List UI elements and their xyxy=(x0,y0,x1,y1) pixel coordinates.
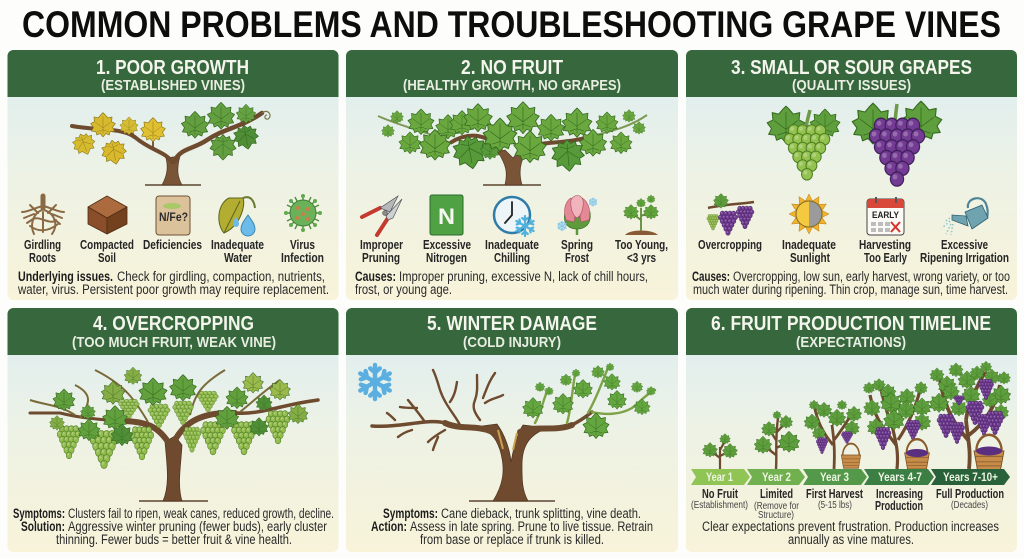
timeline labels: (5-15 lbs) xyxy=(818,500,852,511)
purple grape cluster xyxy=(852,101,942,186)
text block: causes: Causes: xyxy=(355,269,396,284)
icon labels: Inadequate xyxy=(211,238,264,252)
icon: young sprout xyxy=(623,195,659,235)
icon labels: Excessive xyxy=(423,238,471,252)
icon: pruners xyxy=(362,196,402,235)
icon labels xyxy=(360,238,668,265)
icon labels: Too Early xyxy=(864,251,907,265)
icon: nitrogen bag xyxy=(430,195,463,235)
icon: fertilizer bag xyxy=(156,196,190,235)
vine year 2 xyxy=(754,411,800,469)
vine illustration: too many clusters xyxy=(30,367,318,501)
icon: girdling roots xyxy=(22,196,64,234)
text block: causes: Causes: xyxy=(692,269,730,284)
timeline labels: Structure) xyxy=(758,510,794,521)
text block: causes: Improper pruning, excessive N, lack of chill hours, xyxy=(399,269,648,284)
icon: virus xyxy=(284,194,322,232)
icon: wilting leaf and water drop xyxy=(219,197,255,236)
panel 5: winter damage xyxy=(346,308,678,552)
green grape cluster xyxy=(767,106,840,180)
text block: causes xyxy=(692,269,1010,297)
icon: snowflake xyxy=(358,365,392,399)
text block: symptoms and solution: Clusters fail to ripen, weak canes, reduced growth, decline. xyxy=(68,506,334,521)
panel 4: overcropping xyxy=(8,308,338,552)
vine illustration: winter damaged tree xyxy=(372,363,656,501)
panel 6: fruit production timeline xyxy=(686,308,1017,552)
panel 2: no fruit xyxy=(346,50,678,300)
timeline labels: Increasing xyxy=(876,487,923,501)
text block: symptoms and solution: Aggressive winter pruning (fewer buds), early cluster xyxy=(68,519,327,534)
panel 6 header: (EXPECTATIONS) xyxy=(796,334,906,351)
panel 1 header: (ESTABLISHED VINES) xyxy=(101,77,245,94)
icon labels: Deficiencies xyxy=(143,238,202,252)
icon: early calendar xyxy=(867,197,904,235)
timeline labels: Production xyxy=(875,499,923,513)
text block: symptoms and action: Symptoms: xyxy=(383,506,438,521)
text block: causes: frost, or young age. xyxy=(355,282,452,297)
panel 4 header xyxy=(8,308,338,355)
panel 2 header: (HEALTHY GROWTH, NO GRAPES) xyxy=(403,77,621,94)
vine illustration: lush leaves, no fruit xyxy=(378,102,647,185)
text block: symptoms and action: from base or replace if trunk is killed. xyxy=(420,532,604,547)
panel 1 header xyxy=(8,50,338,97)
icon labels: Chilling xyxy=(494,251,530,265)
icon: overcropped cane xyxy=(707,193,754,235)
text block: underlying issues: Check for girdling, compaction, nutrients, xyxy=(117,269,325,284)
icon labels: Compacted xyxy=(80,238,134,252)
icon labels: Excessive xyxy=(941,238,988,252)
vine year 1 xyxy=(702,434,738,469)
panel 5 header: 5. WINTER DAMAGE xyxy=(427,312,597,335)
text block: expectations: annually as vine matures. xyxy=(788,532,914,547)
icon labels: <3 yrs xyxy=(627,251,656,265)
icon labels: Water xyxy=(224,251,252,265)
icon labels: Overcropping xyxy=(698,238,762,252)
panel 2 header xyxy=(346,50,678,97)
icon: frosted spring bud xyxy=(557,196,597,235)
icon labels: Sunlight xyxy=(790,251,831,265)
icon: clock with snowflake xyxy=(494,197,535,236)
panel 3 header: 3. SMALL OR SOUR GRAPES xyxy=(731,56,972,79)
icon labels: Infection xyxy=(281,251,324,265)
text block: underlying issues xyxy=(17,269,329,297)
vine illustration: yellowing leaves xyxy=(70,102,270,185)
text block: symptoms and action: Cane dieback, trunk splitting, vine death. xyxy=(441,506,641,521)
text block: symptoms and solution: Solution: xyxy=(21,519,65,534)
text block: expectations xyxy=(702,519,999,547)
icon: half shaded sun xyxy=(789,194,829,234)
icon: early calendar: EARLY xyxy=(872,210,899,220)
text block: symptoms and action xyxy=(371,506,653,547)
icon labels: Spring xyxy=(561,238,593,252)
icon: nitrogen bag: N xyxy=(438,204,455,229)
panel 1 header: 1. POOR GROWTH xyxy=(96,56,249,79)
timeline arrows: Year 1 xyxy=(706,470,733,484)
icon labels: Inadequate xyxy=(485,238,539,252)
panel 3 header: (QUALITY ISSUES) xyxy=(792,77,911,94)
icon labels xyxy=(24,238,324,265)
icon labels: Soil xyxy=(98,251,116,265)
icon labels: Pruning xyxy=(362,251,400,265)
timeline labels: First Harvest xyxy=(806,487,864,501)
panel 4 header: 4. OVERCROPPING xyxy=(93,312,254,335)
timeline labels: No Fruit xyxy=(702,487,739,501)
timeline labels: Limited xyxy=(760,487,793,501)
panel 2 header: 2. NO FRUIT xyxy=(461,56,563,79)
text block: symptoms and solution xyxy=(13,506,334,547)
text block: symptoms and action: Action: xyxy=(371,519,407,534)
panel 5 header: (COLD INJURY) xyxy=(463,334,561,351)
timeline arrows: Year 2 xyxy=(762,470,791,484)
timeline arrows xyxy=(691,469,1010,485)
vine years 7-10+ with full basket xyxy=(929,361,1011,470)
timeline arrows: Years 4-7 xyxy=(878,470,922,484)
timeline labels: (Remove for xyxy=(754,501,800,512)
timeline labels xyxy=(691,487,1004,521)
icon labels: Girdling xyxy=(24,238,61,252)
text block: symptoms and solution: Symptoms: xyxy=(13,506,65,521)
panel 4 header: (TOO MUCH FRUIT, WEAK VINE) xyxy=(72,334,276,351)
icon labels: Too Young, xyxy=(615,238,668,252)
timeline arrows: Years 7-10+ xyxy=(943,470,998,484)
panel 5 header xyxy=(346,308,678,355)
icon labels xyxy=(698,238,1009,265)
timeline arrows: Year 3 xyxy=(820,470,849,484)
panel 6 header xyxy=(686,308,1017,355)
icon: fertilizer bag: N/Fe? xyxy=(159,212,188,224)
panel 1: poor growth xyxy=(8,50,338,300)
icon labels: Virus xyxy=(290,238,315,252)
panel 3: small or sour grapes xyxy=(686,50,1017,300)
text block: causes xyxy=(355,269,648,297)
text block: symptoms and solution: thinning. Fewer buds = better fruit & vine health. xyxy=(56,532,292,547)
icon labels: Roots xyxy=(29,251,56,265)
icon: watering can xyxy=(942,198,988,235)
timeline labels: (Decades) xyxy=(951,500,988,511)
text block: underlying issues: water, virus. Persistent poor growth may require replacement. xyxy=(17,282,329,297)
panel 3 header xyxy=(686,50,1017,97)
icon: compacted soil xyxy=(88,196,127,234)
timeline labels: (Establishment) xyxy=(691,500,748,511)
vine year 3 with basket xyxy=(804,400,862,469)
text block: symptoms and action: Assess in late spring. Prune to live tissue. Retrain xyxy=(410,519,653,534)
icon labels: Nitrogen xyxy=(426,251,467,265)
icon labels: Inadequate xyxy=(782,238,836,252)
icon labels: Frost xyxy=(565,251,590,265)
icon labels: Harvesting xyxy=(859,238,911,252)
text block: underlying issues: Underlying issues. xyxy=(18,269,113,284)
icon labels: Improper xyxy=(360,238,403,252)
vine years 4-7 with basket xyxy=(863,378,931,469)
